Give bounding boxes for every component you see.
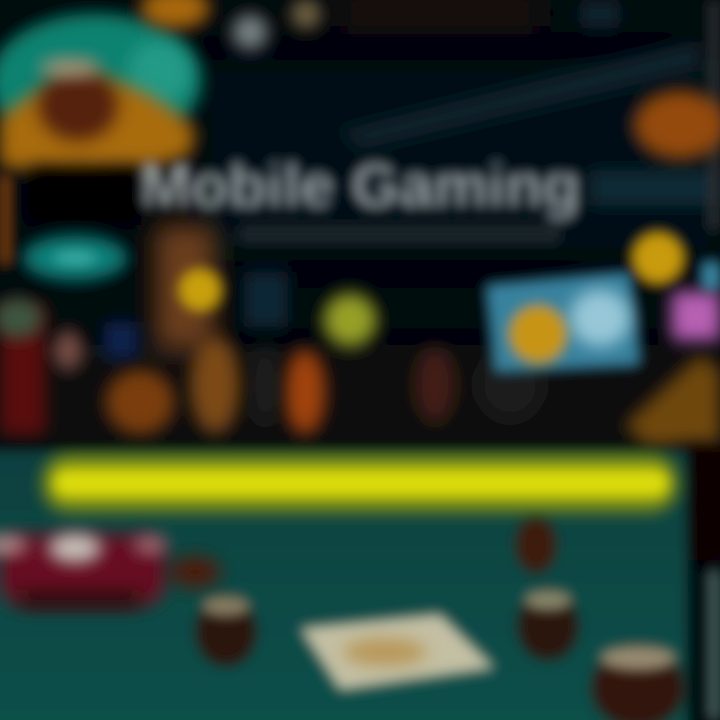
cards: playing card on table [300,614,495,690]
icon: poker chips [196,517,684,720]
banner: yellow highlight bar [44,456,676,510]
title: Mobile Gaming [140,152,580,221]
panel: green table felt [0,450,720,720]
chips: red and white chip stack [0,534,221,610]
panel: phone screen right [486,91,720,560]
panel: crowd of players [0,225,720,440]
icon: gold coins and emoji balloons [179,232,684,346]
panel: slot machine left [0,0,320,280]
